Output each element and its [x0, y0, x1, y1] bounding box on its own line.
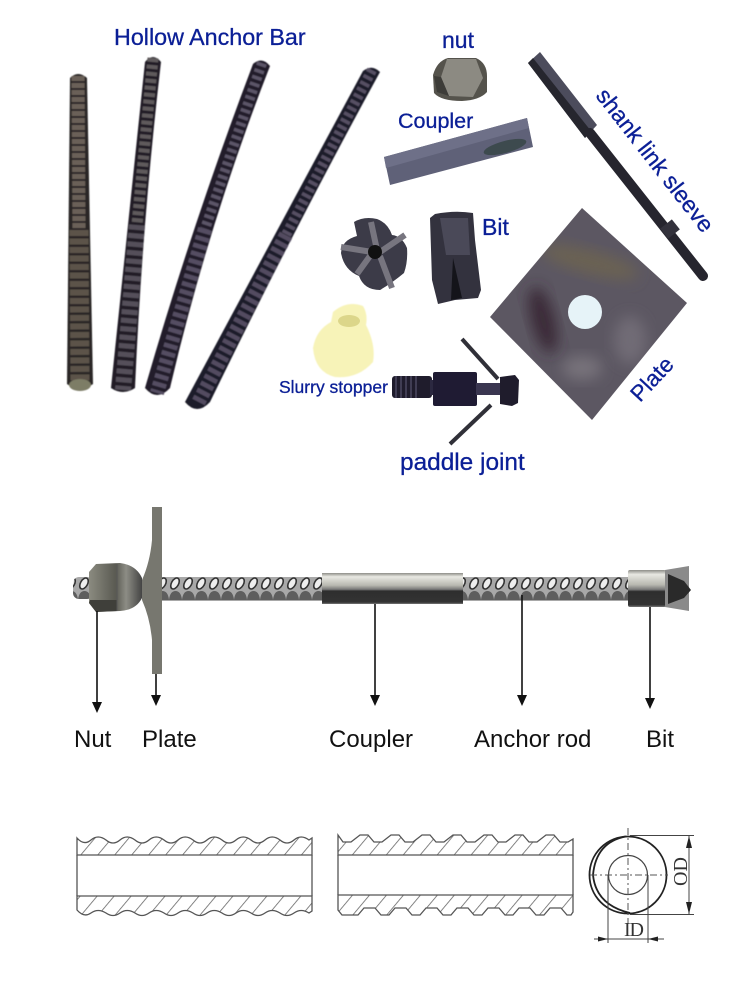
label: shank link sleeve: shank link sleeve — [591, 83, 719, 237]
icon: nut — [433, 58, 487, 101]
ID dimension — [594, 875, 664, 943]
anchor bars group — [67, 57, 380, 409]
assembled bolt — [73, 507, 691, 674]
label: Coupler callout: Coupler — [329, 726, 413, 753]
title: Hollow Anchor Bar: Hollow Anchor Bar — [114, 24, 306, 50]
icon: slurry stopper — [313, 304, 374, 377]
label: Slurry stopper: Slurry stopper — [279, 377, 388, 397]
label: paddle joint: paddle joint — [400, 449, 525, 476]
icon: coupler sleeve — [384, 118, 533, 185]
arrow: plate — [151, 674, 161, 706]
bar 2 — [111, 57, 161, 392]
icon: bit side view — [430, 212, 481, 304]
icon: plate — [490, 208, 687, 420]
rod left section — [160, 577, 323, 601]
drawing: ribbed section — [338, 835, 573, 915]
drawing: cross section — [590, 828, 694, 943]
bar 1 — [67, 74, 93, 391]
OD dimension — [630, 836, 694, 914]
tail thread — [73, 577, 93, 599]
bar 3 — [145, 60, 270, 395]
drawing: wavy section — [77, 837, 312, 916]
icon: paddle joint — [392, 339, 519, 444]
label: nut: nut — [442, 27, 475, 53]
label: Bit callout: Bit — [646, 726, 674, 753]
nut assembled — [89, 563, 142, 612]
label: OD: OD — [670, 857, 692, 886]
label: Coupler: Coupler — [398, 109, 473, 133]
plate profile — [142, 507, 162, 674]
arrow: bit — [645, 607, 655, 709]
coupler assembled — [322, 573, 463, 604]
label: Bit: Bit — [482, 214, 509, 240]
rod right section — [462, 577, 630, 601]
label: Nut: Nut — [74, 726, 112, 753]
bar 4 — [185, 68, 380, 409]
bit head assembled — [665, 566, 689, 611]
label: Plate callout: Plate — [142, 726, 197, 753]
label: Anchor rod: Anchor rod — [474, 726, 591, 753]
icon: shank link sleeve — [528, 52, 703, 276]
label: Plate: Plate — [625, 352, 679, 406]
arrow: anchor rod — [517, 595, 527, 706]
bit body assembled — [628, 570, 666, 607]
label: ID: ID — [624, 919, 644, 941]
arrow: nut — [92, 611, 102, 713]
arrow: coupler — [370, 604, 380, 706]
icon: bit front view — [341, 218, 407, 290]
